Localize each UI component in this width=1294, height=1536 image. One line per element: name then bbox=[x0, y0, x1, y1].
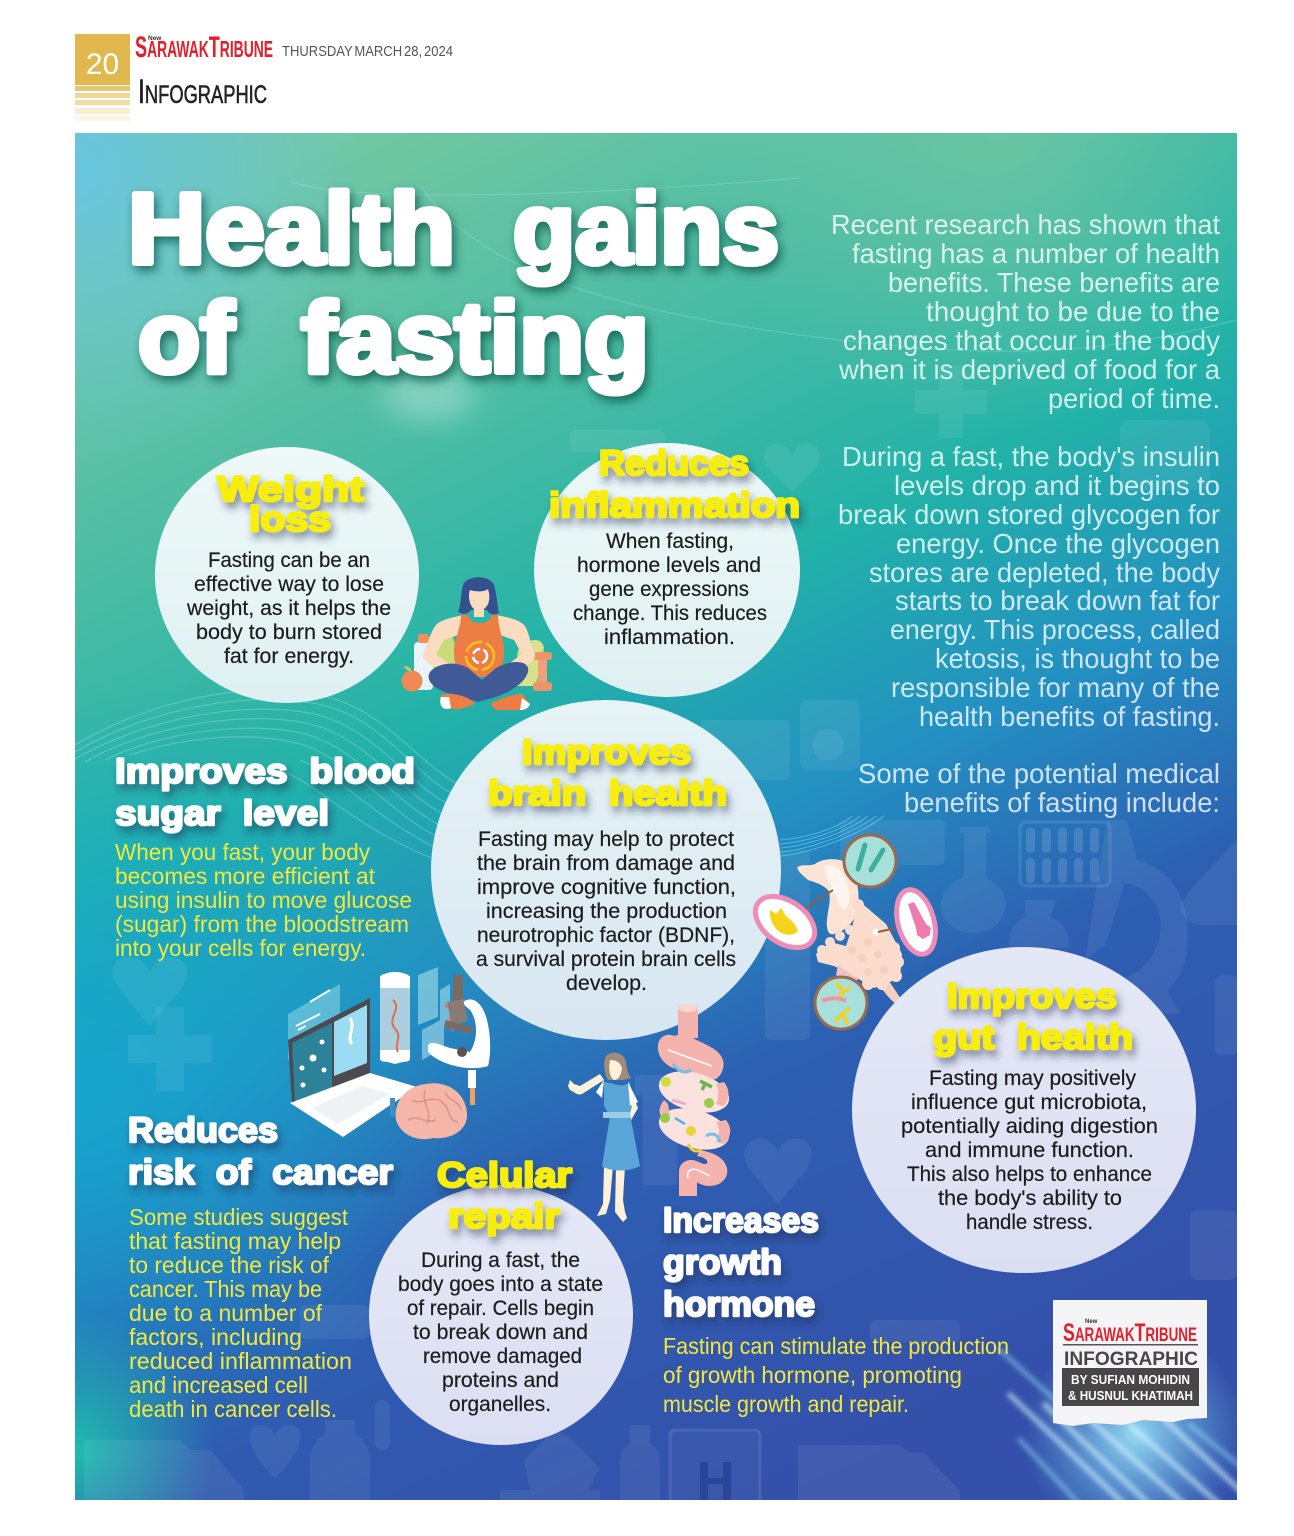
panel: reduces inflammation: Reduces bbox=[599, 444, 749, 483]
icon: standing woman bbox=[568, 1053, 640, 1222]
header: date: THURSDAY MARCH 28, 2024 bbox=[282, 43, 453, 60]
panel: improves blood sugar level: When you fast, your body bbox=[115, 839, 370, 865]
intro text: Some of the potential medical bbox=[858, 758, 1220, 789]
title: of bbox=[138, 282, 235, 394]
panel: reduces risk of cancer: that fasting may help bbox=[129, 1228, 341, 1254]
panel: reduces inflammation: inflammation. bbox=[604, 625, 735, 649]
panel: improves blood sugar level: using insulin to move glucose bbox=[115, 887, 412, 913]
title: Health bbox=[128, 173, 455, 285]
title bbox=[128, 173, 779, 394]
panel: improves brain health: a survival protein brain cells bbox=[476, 947, 736, 971]
header: section name: INFOGRAPHIC bbox=[138, 73, 267, 111]
panel: reduces inflammation: hormone levels and bbox=[577, 553, 761, 577]
panel: increases growth hormone: growth bbox=[663, 1243, 782, 1282]
panel: reduces inflammation: inflammation bbox=[549, 486, 800, 525]
panel: improves gut health: Improves bbox=[947, 977, 1117, 1016]
panel: improves blood sugar level: (sugar) from the bloodstream bbox=[115, 911, 409, 937]
panel: improves brain health: brain health bbox=[488, 774, 727, 813]
header: page number block: 20 bbox=[86, 48, 119, 81]
intro text: health benefits of fasting. bbox=[919, 701, 1220, 732]
intro text: benefits. These benefits are bbox=[888, 267, 1220, 298]
panel: improves blood sugar level: becomes more efficient at bbox=[115, 863, 376, 889]
panel: improves brain health bbox=[431, 700, 781, 1040]
wave lines bbox=[75, 690, 470, 860]
mid icons bbox=[915, 366, 987, 438]
panel: weight loss: Fasting can be an bbox=[208, 548, 370, 572]
panel: improves blood sugar level: sugar level bbox=[115, 794, 329, 833]
intro text: levels drop and it begins to bbox=[894, 470, 1220, 501]
panel: increases growth hormone: hormone bbox=[663, 1285, 815, 1324]
panel: improves gut health: the body's ability to bbox=[938, 1186, 1122, 1210]
panel: cellular repair: Celular bbox=[437, 1156, 572, 1195]
credit badge: SARAWAKTRIBUNE bbox=[1063, 1319, 1197, 1347]
capsule rows bbox=[1026, 828, 1099, 883]
intro text: responsible for many of the bbox=[891, 672, 1220, 703]
icon: laptop, DNA and microscope lab bbox=[288, 967, 490, 1139]
panel: weight loss: loss bbox=[249, 500, 331, 539]
panel: reduces risk of cancer: death in cancer cells. bbox=[129, 1396, 337, 1422]
lower left and middle bbox=[765, 850, 810, 1040]
panel: reduces inflammation bbox=[534, 443, 800, 697]
icon: woman sitting cross-legged bbox=[402, 577, 552, 710]
panel: improves brain health: increasing the production bbox=[486, 899, 727, 923]
panel: reduces risk of cancer: risk of cancer bbox=[128, 1153, 393, 1192]
panel: cellular repair: During a fast, the bbox=[421, 1248, 580, 1272]
panel: weight loss: body to burn stored bbox=[196, 620, 382, 644]
header: page number block bbox=[75, 34, 130, 121]
panel: reduces risk of cancer: Some studies suggest bbox=[129, 1204, 349, 1230]
panel: increases growth hormone: of growth hormone, promoting bbox=[663, 1362, 962, 1388]
panel: increases growth hormone: muscle growth and repair. bbox=[663, 1391, 909, 1417]
icon: digestive system bbox=[746, 835, 942, 1029]
intro text: Recent research has shown that bbox=[831, 209, 1220, 240]
panel: improves brain health: develop. bbox=[566, 971, 647, 995]
panel: reduces risk of cancer bbox=[128, 1111, 393, 1422]
title: gains bbox=[513, 173, 779, 285]
panel: reduces risk of cancer: cancer. This may be bbox=[129, 1276, 322, 1302]
intro text: ketosis, is thought to be bbox=[935, 643, 1220, 674]
panel: weight loss bbox=[155, 447, 419, 703]
header: newspaper name: New bbox=[148, 35, 162, 42]
title: fasting bbox=[301, 282, 649, 394]
panel: reduces inflammation: When fasting, bbox=[606, 529, 734, 553]
intro text: changes that occur in the body bbox=[843, 325, 1220, 356]
panel: cellular repair: remove damaged bbox=[423, 1344, 582, 1368]
panel: cellular repair: proteins and bbox=[442, 1368, 559, 1392]
icon: intestine with bacteria bbox=[654, 1004, 734, 1196]
panel: cellular repair: repair bbox=[448, 1197, 560, 1236]
panel: weight loss: fat for energy. bbox=[224, 644, 354, 668]
panel: increases growth hormone: Fasting can stimulate the production bbox=[663, 1333, 1009, 1359]
panel: improves brain health: neurotrophic factor (BDNF), bbox=[477, 923, 735, 947]
panel: weight loss: Weight bbox=[217, 470, 364, 509]
panel: improves brain health: improve cognitive function, bbox=[477, 875, 736, 899]
intro text: period of time. bbox=[1048, 383, 1220, 414]
panel: improves brain health: Improves bbox=[522, 733, 691, 772]
intro text: when it is deprived of food for a bbox=[838, 354, 1220, 385]
panel: improves gut health: potentially aiding digestion bbox=[901, 1114, 1158, 1138]
panel: cellular repair bbox=[369, 1156, 633, 1445]
intro text: benefits of fasting include: bbox=[904, 787, 1220, 818]
panel: improves brain health: Fasting may help to protect bbox=[478, 827, 734, 851]
intro text: starts to break down fat for bbox=[895, 585, 1220, 616]
intro text: energy. This process, called bbox=[890, 614, 1220, 645]
credit badge: New bbox=[1085, 1319, 1098, 1325]
upper right icons bbox=[1085, 820, 1188, 1016]
panel: improves gut health: gut health bbox=[933, 1018, 1133, 1057]
panel: reduces risk of cancer: factors, including bbox=[129, 1324, 302, 1350]
panel: reduces risk of cancer: Reduces bbox=[128, 1111, 278, 1150]
panel: increases growth hormone bbox=[663, 1201, 1009, 1417]
credit badge: & HUSNUL KHATIMAH bbox=[1068, 1388, 1193, 1403]
panel: improves blood sugar level: into your cells for energy. bbox=[115, 935, 366, 961]
panel: cellular repair: of repair. Cells begin bbox=[407, 1296, 594, 1320]
panel: reduces risk of cancer: reduced inflammation bbox=[129, 1348, 352, 1374]
panel: reduces risk of cancer: to reduce the risk of bbox=[129, 1252, 330, 1278]
bottom row icons bbox=[84, 1440, 244, 1500]
panel: improves blood sugar level bbox=[115, 752, 415, 961]
panel: improves brain health: the brain from damage and bbox=[477, 851, 735, 875]
hospital outline bbox=[670, 822, 1110, 1505]
intro text: thought to be due to the bbox=[926, 296, 1220, 327]
header: newspaper name: SARAWAKTRIBUNE bbox=[135, 31, 273, 64]
panel: improves gut health bbox=[852, 947, 1196, 1273]
panel: improves gut health: and immune function. bbox=[925, 1138, 1134, 1162]
credit badge: INFOGRAPHIC bbox=[1064, 1349, 1198, 1370]
panel: improves gut health: influence gut microbiota, bbox=[911, 1090, 1147, 1114]
panel: reduces risk of cancer: and increased cell bbox=[129, 1372, 308, 1398]
panel: improves gut health: handle stress. bbox=[966, 1210, 1093, 1234]
intro text: break down stored glycogen for bbox=[838, 499, 1220, 530]
intro text bbox=[831, 209, 1220, 818]
panel: weight loss: weight, as it helps the bbox=[186, 596, 391, 620]
panel: reduces inflammation: gene expressions bbox=[589, 577, 749, 601]
intro text: energy. Once the glycogen bbox=[896, 528, 1220, 559]
panel: increases growth hormone: Increases bbox=[663, 1201, 819, 1240]
panel: cellular repair: to break down and bbox=[413, 1320, 588, 1344]
panel: improves gut health: Fasting may positively bbox=[929, 1066, 1136, 1090]
credit badge: BY SUFIAN MOHIDIN bbox=[1071, 1372, 1190, 1387]
intro text: stores are depleted, the body bbox=[869, 557, 1220, 588]
panel: cellular repair: body goes into a state bbox=[398, 1272, 603, 1296]
intro text: During a fast, the body's insulin bbox=[842, 441, 1220, 472]
panel: weight loss: effective way to lose bbox=[194, 572, 384, 596]
panel: improves gut health: This also helps to enhance bbox=[907, 1162, 1152, 1186]
panel: reduces risk of cancer: due to a number of bbox=[129, 1300, 323, 1326]
faint arcs bbox=[290, 178, 1237, 351]
panel: cellular repair: organelles. bbox=[449, 1392, 551, 1416]
panel: reduces inflammation: change. This reduces bbox=[573, 601, 767, 625]
credit badge bbox=[1053, 1300, 1207, 1426]
panel: improves blood sugar level: Improves blood bbox=[115, 752, 415, 791]
intro text: fasting has a number of health bbox=[852, 238, 1220, 269]
